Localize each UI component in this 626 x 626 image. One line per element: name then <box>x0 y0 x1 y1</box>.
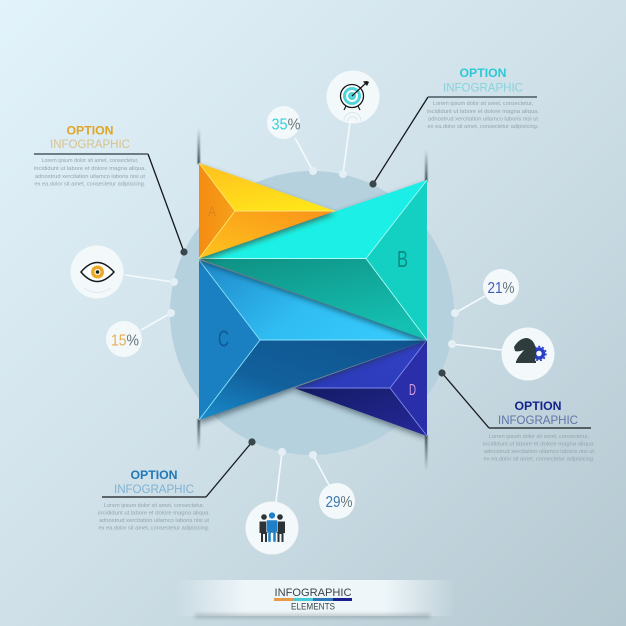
callout A: INFOGRAPHIC <box>50 137 130 151</box>
callout B: incididunt ut labore et dolore magna aliqua. <box>427 109 539 115</box>
pyramid chart <box>199 163 427 439</box>
callout B: adnostrud xercitation ullamco laboris nisi ut <box>428 116 538 122</box>
vertical guide shadows <box>198 128 428 470</box>
percent 29 <box>309 451 355 519</box>
segment D: navy triangle <box>294 340 427 439</box>
callout C: incididunt ut labore et dolore magna aliqua. <box>98 510 210 516</box>
callout D: incididunt ut labore et dolore magna aliqua. <box>483 442 595 448</box>
callout B: ex ea.dolor sit amet, consectetur adipisicing. <box>428 124 539 130</box>
callout C: Lorem ipsum dolor sit amet, consectetur, <box>104 503 204 509</box>
callout D: Lorem ipsum dolor sit amet, consectetur, <box>489 434 589 440</box>
percent 21 <box>451 269 519 317</box>
callout A: OPTION <box>66 126 114 138</box>
icon: eye <box>70 246 178 298</box>
callout B <box>369 68 539 188</box>
callout A: adnostrud xercitation ullamco laboris nisi ut <box>35 174 145 180</box>
callout C: INFOGRAPHIC <box>114 482 194 496</box>
percent 21: 21% <box>488 280 514 297</box>
callout B: Lorem ipsum dolor sit amet, consectetur, <box>433 101 533 107</box>
segment A: yellow triangle <box>199 163 335 262</box>
banner: infographic elements: ELEMENTS <box>291 602 335 612</box>
callout A: incididunt ut labore et dolore magna aliqua. <box>34 166 146 172</box>
percent 15: 15% <box>111 332 139 350</box>
callout C <box>98 438 256 532</box>
percent 15 <box>106 309 175 357</box>
icon: people <box>246 448 298 554</box>
segment A: yellow triangle: A <box>208 203 216 219</box>
callout C: OPTION <box>130 470 178 482</box>
percent 35 <box>267 106 317 175</box>
callout A: ex ea.dolor sit amet, consectetur adipisicing. <box>34 182 146 188</box>
callout D <box>438 369 595 462</box>
segment B: teal triangle: B <box>397 246 408 272</box>
icon: chess knight and gear <box>448 328 554 380</box>
icon: target <box>326 70 380 178</box>
callout C: adnostrud xercitation ullamco laboris nisi ut <box>99 518 209 524</box>
segment D: navy triangle: D <box>409 382 416 399</box>
callout A <box>34 126 188 256</box>
callout B: OPTION <box>460 68 506 80</box>
callout C: ex ea.dolor sit amet, consectetur adipisicing. <box>98 526 210 532</box>
percent 29: 29% <box>326 494 352 511</box>
segment C: blue triangle: C <box>218 326 229 352</box>
segment B: teal triangle <box>199 180 427 343</box>
banner: infographic elements <box>175 580 455 617</box>
segment C: blue triangle <box>199 260 427 424</box>
banner: infographic elements: INFOGRAPHIC <box>274 587 352 599</box>
callout D: adnostrud xercitation ullamco laboris nisi ut <box>484 449 594 455</box>
central circle <box>170 171 454 455</box>
callout D: INFOGRAPHIC <box>498 413 578 427</box>
callout B: INFOGRAPHIC <box>443 80 523 94</box>
callout A: Lorem ipsum dolor sit amet, consectetur, <box>42 158 139 164</box>
callout D: OPTION <box>514 401 562 413</box>
percent 35: 35% <box>272 116 300 134</box>
callout D: ex ea.dolor sit amet, consectetur adipisicing. <box>484 456 595 462</box>
